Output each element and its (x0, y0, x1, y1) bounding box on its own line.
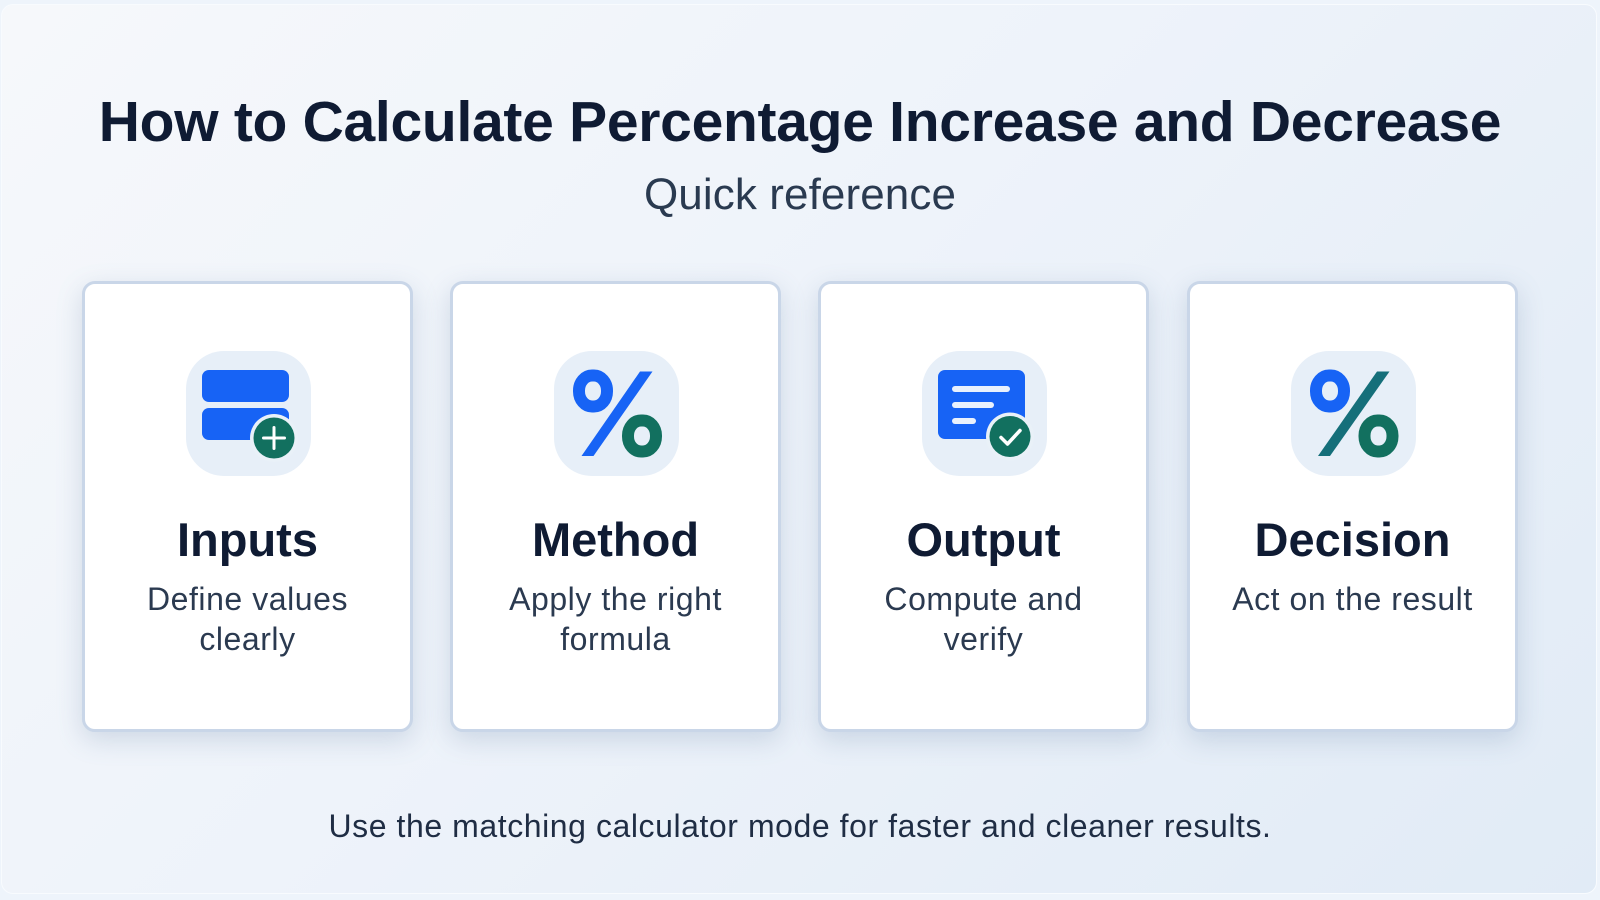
panel: method (450, 281, 781, 732)
text: output description: verify (944, 620, 1023, 656)
heading: decision: Decision (1255, 513, 1450, 566)
text: inputs description (147, 580, 348, 656)
footer note: Use the matching calculator mode for faster and cleaner results. (329, 808, 1271, 844)
text: method description (509, 580, 722, 656)
text: inputs description: clearly (199, 620, 296, 656)
icon: percent blue (554, 351, 679, 476)
text: decision description: Act on the result (1232, 580, 1473, 616)
text: method description: Apply the right (509, 580, 722, 616)
heading: method: Method (532, 513, 699, 566)
subtitle: Quick reference (644, 170, 956, 218)
text: method description: formula (560, 620, 671, 656)
heading: output: Output (906, 513, 1060, 566)
icon: stacked fields with plus (186, 351, 311, 476)
text: inputs description: Define values (147, 580, 348, 616)
panel: inputs (82, 281, 413, 732)
text: output description (884, 580, 1083, 656)
panel: output (818, 281, 1149, 732)
title: How to Calculate Percentage Increase and Decrease (99, 90, 1501, 154)
icon: document with check (922, 351, 1047, 476)
heading: inputs: Inputs (177, 513, 318, 566)
text: output description: Compute and (884, 580, 1083, 616)
panel: decision (1187, 281, 1518, 732)
icon: percent teal (1291, 351, 1416, 476)
